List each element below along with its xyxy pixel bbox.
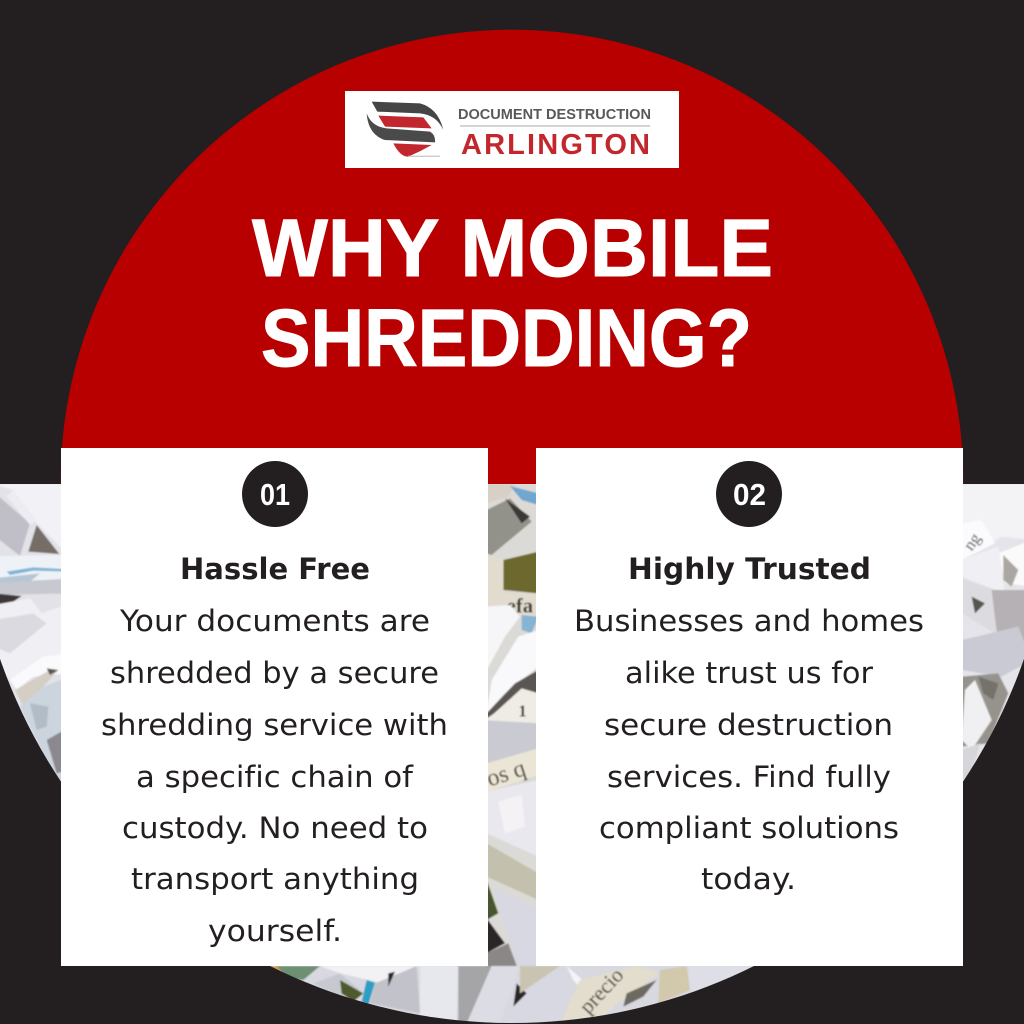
photo strip: bottom: precio	[574, 963, 628, 1018]
logo background	[345, 91, 679, 168]
number badge 01	[242, 461, 308, 527]
text block: highly trusted: Businesses and homes	[574, 604, 924, 638]
number badge 01: 01	[260, 477, 290, 512]
heading: highly trusted: Highly Trusted	[628, 552, 871, 586]
photo strip: bottom	[270, 965, 690, 1021]
text block: hassle free: shredded by a secure	[110, 656, 439, 690]
text block: highly trusted: services. Find fully	[607, 760, 891, 794]
photo strip: right: ng	[959, 529, 985, 554]
photo strip: left	[0, 484, 61, 780]
logo text: arlington: ARLINGTON	[461, 129, 650, 161]
panel: highly trusted	[536, 448, 963, 966]
title: SHREDDING?	[261, 293, 752, 384]
shredded paper photo	[0, 470, 1024, 1024]
text block: hassle free: a specific chain of	[136, 760, 414, 794]
title	[252, 203, 773, 384]
photo strip: centre: efa	[507, 596, 534, 618]
number badge 02	[716, 461, 782, 527]
text block: highly trusted: secure destruction	[604, 708, 893, 742]
logo	[345, 91, 679, 168]
photo strip: centre: 1	[518, 702, 527, 721]
text block: hassle free: yourself.	[208, 914, 342, 948]
photo strip: right	[963, 484, 1024, 747]
text block: highly trusted: compliant solutions	[599, 811, 899, 845]
logo icon	[367, 102, 443, 157]
text block: hassle free: transport anything	[131, 862, 419, 896]
text block: hassle free: shredding service with	[101, 708, 448, 742]
text block: hassle free: Your documents are	[119, 604, 430, 638]
text block: hassle free	[101, 604, 448, 948]
panel: hassle free	[61, 448, 488, 966]
heading: hassle free: Hassle Free	[180, 552, 370, 586]
text block: hassle free: custody. No need to	[122, 811, 428, 845]
red semicircle	[60, 30, 964, 484]
text block: highly trusted	[574, 604, 924, 896]
title: WHY MOBILE	[252, 203, 773, 294]
text block: highly trusted: alike trust us for	[625, 656, 873, 690]
number badge 02: 02	[733, 477, 766, 512]
photo strip: centre: os q	[483, 755, 529, 792]
card background	[61, 448, 488, 966]
card background	[536, 448, 963, 966]
photo strip: centre	[483, 484, 538, 971]
text block: highly trusted: today.	[701, 862, 796, 896]
logo text: document destruction: DOCUMENT DESTRUCTION	[458, 107, 651, 123]
